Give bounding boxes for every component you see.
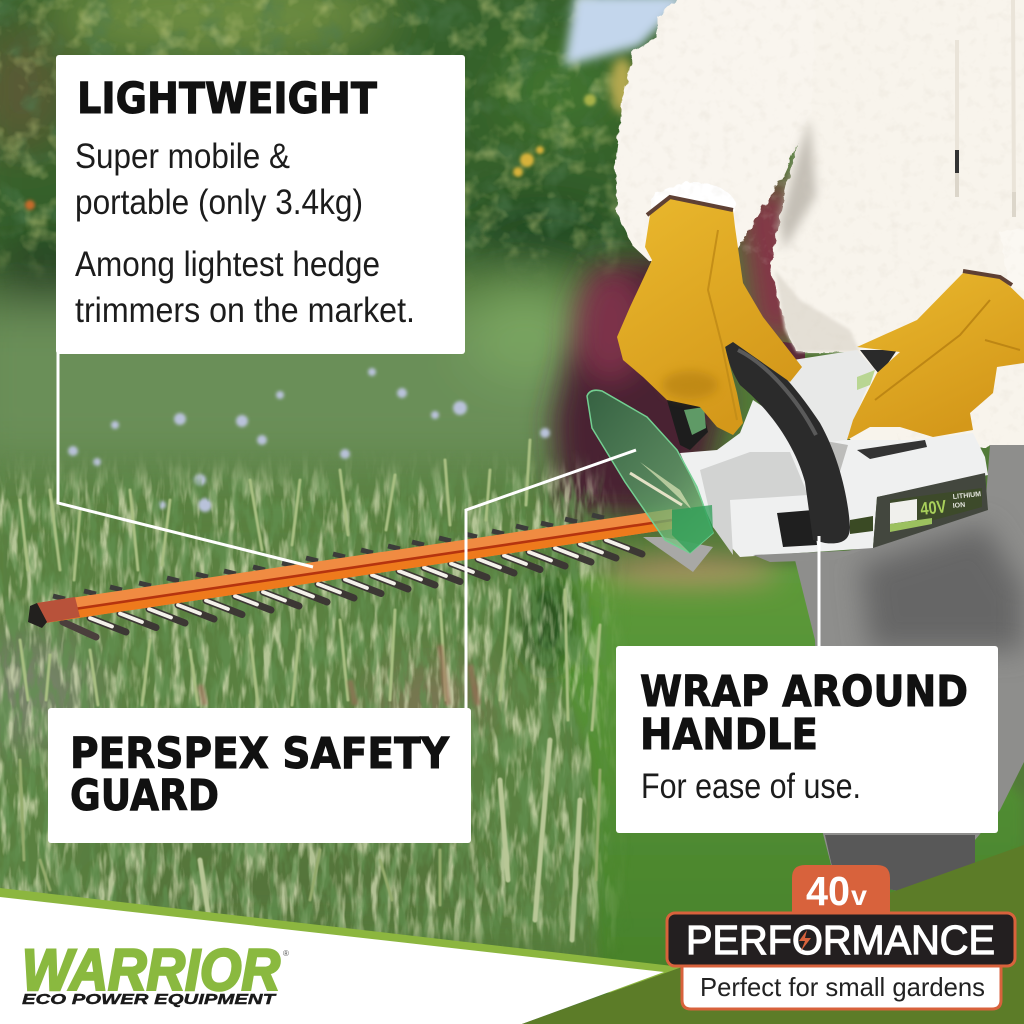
hedge trimmer: [28, 340, 988, 637]
reddish rosemary stems: [200, 645, 478, 705]
foliage texture: [0, 0, 618, 254]
hoodie drawstrings: [957, 0, 1014, 217]
callout: perspex safety guard: [48, 708, 471, 843]
yellow foliage spots: [25, 94, 596, 210]
tagline box: [682, 964, 1001, 1009]
40v tab: [792, 865, 890, 914]
lower blade teeth: [63, 540, 642, 637]
heading: perspex safety guard: GUARD: [70, 771, 219, 821]
lawn shadow and tan blur: [522, 559, 780, 670]
body text: lightweight: trimmers on the market.: [75, 291, 415, 330]
heading: wrap around handle: HANDLE: [640, 710, 818, 760]
leader lines: [58, 350, 819, 710]
body text: lightweight: [75, 137, 415, 330]
rosemary bush texture: [0, 450, 640, 960]
shrub behind handle: [782, 342, 805, 360]
icon: lightning bolt: [799, 930, 811, 951]
40v tab: 40: [806, 868, 850, 914]
left glove: [617, 197, 802, 435]
battery label text: 40V: [919, 496, 947, 519]
yellow foliage by sleeve: [610, 57, 634, 113]
wrap-around handle: [725, 340, 850, 543]
trimmer body shell: [680, 400, 988, 557]
orange blade bar: [28, 509, 672, 628]
nose under guard: [643, 537, 713, 572]
dark red shrub: [552, 175, 800, 515]
black socket: [777, 510, 817, 547]
battery pack: LITHIUM: [952, 491, 982, 501]
perspex safety guard: [587, 390, 713, 553]
rear handle: [860, 350, 897, 375]
logo: Warrior: WARRIOR: [22, 938, 280, 1003]
sunlit foliage texture: [0, 0, 626, 274]
battery pack: ION: [952, 502, 966, 510]
heading: wrap around handle: [640, 667, 968, 760]
right glove: [847, 271, 1024, 440]
green sticker: [850, 516, 873, 534]
lawn: [525, 565, 1024, 1000]
green button: [857, 370, 875, 390]
heading: wrap around handle: WRAP AROUND: [640, 667, 968, 717]
heading: perspex safety guard: PERSPEX SAFETY: [70, 729, 450, 779]
callout: wrap around handle: [616, 646, 998, 833]
person: white fleece jacket: [615, 0, 1024, 447]
body text: lightweight: portable (only 3.4kg): [75, 183, 363, 222]
person: grey trousers: [795, 445, 1024, 892]
callout: lightweight: [56, 55, 465, 354]
tagline box: Perfect for small gardens: [700, 972, 985, 1002]
body text: wrap around handle: For ease of use.: [641, 767, 861, 806]
sky: [564, 0, 690, 66]
footer band: [0, 845, 1024, 1024]
performance box: PERFORMANCE: [686, 917, 995, 963]
battery pack: [873, 473, 988, 548]
jacket underarm shadow: [780, 118, 816, 250]
label plate: [857, 440, 927, 459]
rosemary shadow texture: [0, 462, 612, 939]
body text: lightweight: Among lightest hedge: [75, 245, 380, 284]
40v tab: v: [851, 880, 867, 911]
badge: 40v performance: [667, 865, 1015, 1009]
logo: Warrior: ECO POWER EQUIPMENT: [22, 992, 277, 1008]
body text: lightweight: Super mobile &: [75, 137, 290, 176]
upper blade teeth: [53, 515, 604, 599]
jacket lower shade: [775, 270, 860, 352]
jacket fleece texture: [617, 0, 1024, 445]
heading: perspex safety guard: [70, 729, 450, 821]
lavender flower dots: [68, 368, 550, 512]
heading: lightweight: LIGHTWEIGHT: [77, 74, 378, 124]
logo: Warrior: ®: [283, 949, 289, 958]
front grip: [667, 400, 708, 450]
rosemary spikes: [20, 440, 600, 940]
